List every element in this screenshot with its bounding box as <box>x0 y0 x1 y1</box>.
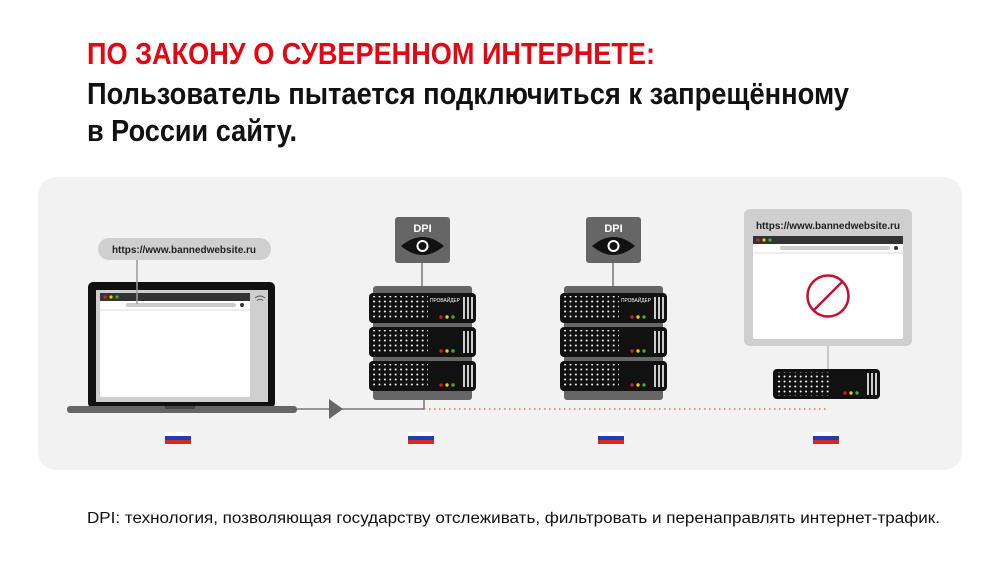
flags <box>165 432 839 444</box>
server: provider 2: ПРОВАЙДЕР <box>621 296 651 304</box>
dotted connection line <box>424 408 828 410</box>
footer note: DPI: технология, позволяющая государству отслеживать, фильтровать и перенаправлять интернет-трафик. <box>87 510 940 527</box>
title: ПО ЗАКОНУ О СУВЕРЕННОМ ИНТЕРНЕТЕ: <box>87 36 655 71</box>
server: provider 2 <box>560 217 667 400</box>
icon: DPI eye <box>586 217 641 263</box>
panel: diagram <box>38 177 962 470</box>
server: provider 1: ПРОВАЙДЕР <box>430 296 460 304</box>
server: website <box>773 369 880 399</box>
icon: DPI eye <box>395 217 450 263</box>
arrow <box>297 399 424 419</box>
website window blocked <box>744 209 912 346</box>
title: в России сайту. <box>87 113 297 148</box>
icon: prohibition <box>808 276 848 316</box>
title: Пользователь пытается подключиться к запрещённому <box>87 76 850 111</box>
laptop <box>67 260 297 413</box>
url bubble <box>98 238 271 260</box>
server: provider 1 <box>369 217 476 409</box>
icon: DPI eye: DPI <box>413 223 432 235</box>
title <box>87 36 850 148</box>
url bubble: https://www.bannedwebsite.ru <box>112 245 256 256</box>
website window blocked: https://www.bannedwebsite.ru <box>756 221 900 232</box>
icon: DPI eye: DPI <box>604 223 623 235</box>
